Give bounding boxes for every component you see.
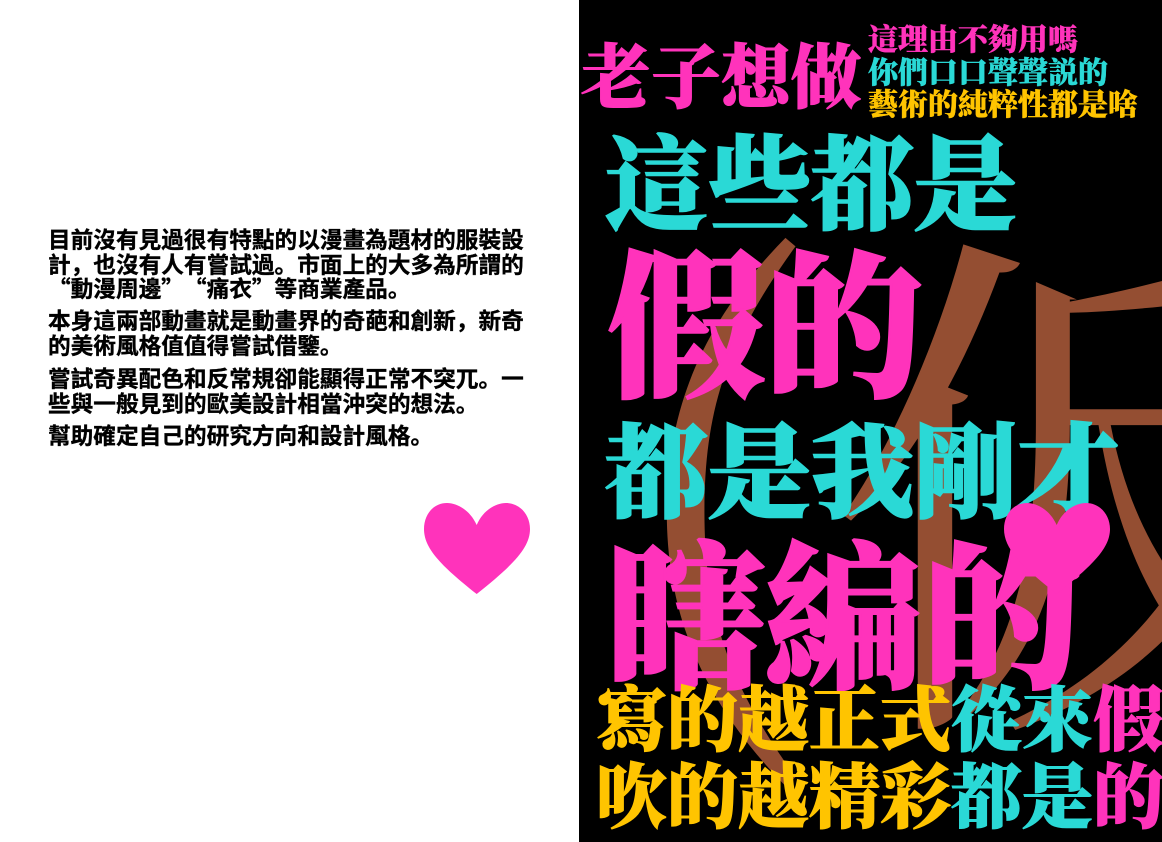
background glyph [618, 62, 1162, 840]
background glyph: ( [618, 62, 811, 824]
text block: design notes: 目前沒有見過很有特點的以漫畫為題材的服裝設 [48, 222, 524, 255]
bottom line 1: 寫的越正式 [596, 664, 951, 766]
heading: 都是我剛才: 都是我剛才 [605, 391, 1120, 539]
small text lines: 你們口口聲聲説的 [868, 48, 1108, 92]
bottom line 1 [596, 664, 1162, 766]
text block: design notes: 些與一般見到的歐美設計相當沖突的想法。 [48, 386, 478, 418]
heading: 這些都是: 這些都是 [605, 103, 1017, 251]
small text lines: 藝術的純粹性都是啥 [868, 80, 1138, 124]
bottom line 2 [596, 741, 1162, 842]
text block: design notes: “動漫周邊”“痛衣”等商業產品。 [48, 271, 410, 304]
icon: heart right [1004, 503, 1110, 594]
text block: design notes: 計，也沒有人有嘗試過。市面上的大多為所謂的 [48, 246, 524, 280]
small text lines [868, 15, 1138, 124]
heading: 老子想做: 老子想做 [581, 22, 861, 123]
icon: heart left [424, 503, 530, 594]
text block: design notes: 嘗試奇異配色和反常規卻能顯得正常不突兀。一 [48, 361, 524, 394]
text block: design notes: 幫助確定自己的研究方向和設計風格。 [48, 418, 433, 450]
bottom line 1: 從來 [951, 664, 1095, 766]
bottom line 2: 吹的越精彩 [596, 741, 951, 842]
bottom line 2: 都是 [951, 741, 1093, 842]
text block: design notes [48, 222, 524, 450]
small text lines: 這理由不夠用嗎 [868, 15, 1078, 59]
heading: 假的: 假的 [607, 203, 923, 430]
text block: design notes: 的美術風格值值得嘗試借鑒。 [48, 328, 343, 360]
text block: design notes: 本身這兩部動畫就是動畫界的奇葩和創新，新奇 [48, 303, 524, 336]
panel: black poster [579, 0, 1162, 842]
heading: 瞎編的: 瞎編的 [607, 494, 1081, 721]
bottom line 1: 假 [1093, 664, 1162, 766]
